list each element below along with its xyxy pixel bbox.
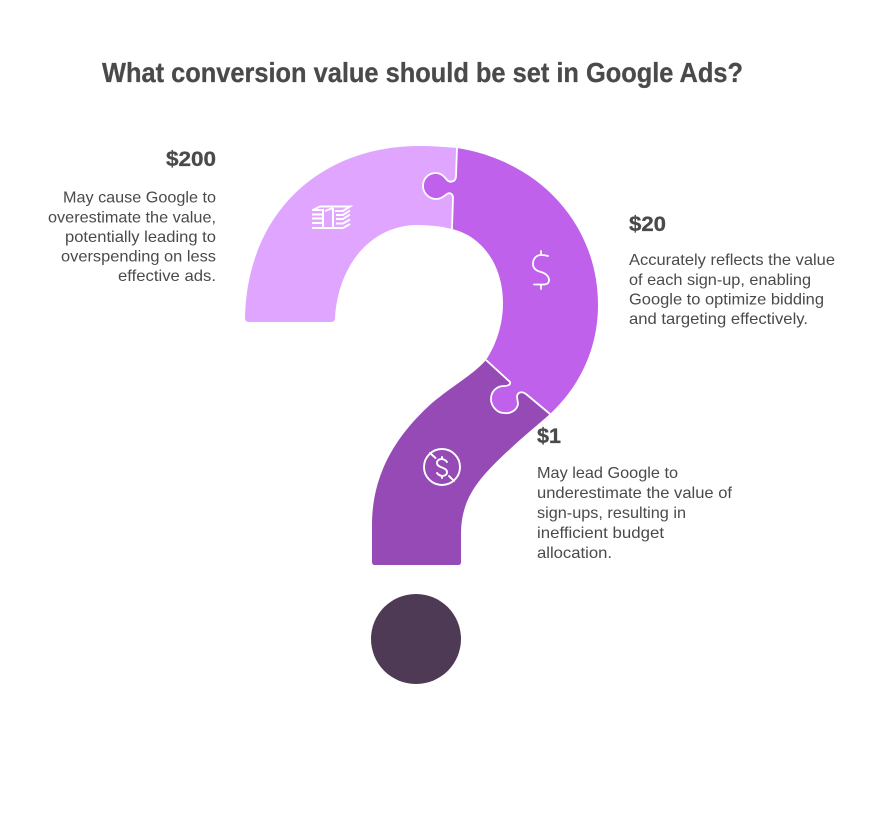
icon: stack of money [312, 206, 350, 228]
segment: dark purple $1 [372, 360, 550, 565]
text block: $20 [629, 212, 835, 328]
text block: $200: effective ads. [118, 268, 216, 285]
text block: $1 [537, 424, 733, 562]
text block: $1: underestimate the value of [537, 485, 733, 502]
segment: medium purple $20 [423, 148, 598, 414]
text block: $200: potentially leading to [65, 229, 216, 246]
text block: $1: $1 [537, 424, 561, 448]
text block: $200: overspending on less [61, 248, 216, 266]
title: What conversion value should be set in Google Ads? [102, 57, 743, 88]
text block: $200: $200 [166, 147, 216, 171]
icon: no dollar [424, 449, 460, 485]
text block: $200: May cause Google to [63, 190, 216, 206]
icon: dollar sign [533, 251, 549, 289]
question mark graphic [245, 146, 598, 684]
dot of question mark [371, 594, 461, 684]
text block: $1: inefficient budget [537, 525, 665, 542]
text block: $20: $20 [629, 212, 666, 236]
text block: $1: sign-ups, resulting in [537, 505, 686, 522]
text block: $20: Google to optimize bidding [629, 292, 824, 308]
text block: $20: of each sign-up, enabling [629, 272, 811, 289]
text block: $20: Accurately reflects the value [629, 252, 835, 269]
seams [423, 148, 457, 229]
text block: $20: and targeting effectively. [629, 311, 808, 328]
segment: light purple $200 [245, 146, 457, 322]
text block: $200 [48, 147, 216, 285]
text block: $200: overestimate the value, [48, 210, 216, 226]
text block: $1: allocation. [537, 545, 612, 562]
text block: $1: May lead Google to [537, 465, 678, 482]
